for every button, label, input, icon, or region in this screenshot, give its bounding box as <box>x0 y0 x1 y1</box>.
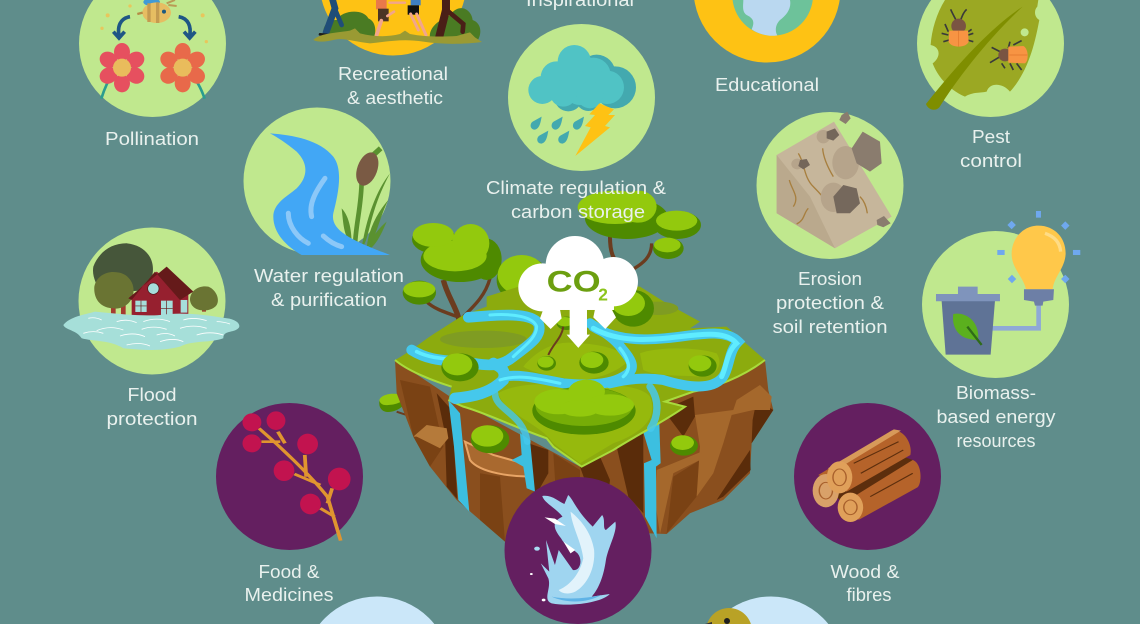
icon: globe <box>732 0 813 36</box>
label: water regulation: Water regulation <box>254 266 404 286</box>
label: pest control: Pest <box>972 127 1010 147</box>
label: water regulation: & purification <box>271 290 387 310</box>
panel: pollination icon <box>79 0 226 117</box>
icon: bin <box>936 287 1000 355</box>
icon: small cliff tree <box>379 394 432 427</box>
icon: branch <box>259 428 341 541</box>
panel: biomass energy icon <box>922 211 1080 378</box>
panel: bottom right circle <box>698 596 844 624</box>
label: climate regulation: Climate regulation & <box>486 178 666 198</box>
icon: leaf midrib <box>926 7 1023 110</box>
labels <box>105 64 1056 605</box>
panel: erosion protection icon <box>756 112 904 259</box>
panel: island <box>379 191 773 580</box>
icon: right tree <box>578 191 701 270</box>
label: flood: protection <box>106 409 198 429</box>
label: erosion: Erosion <box>798 269 862 289</box>
icon: river <box>270 133 390 255</box>
waterfalls <box>448 400 661 538</box>
icon: orange flower <box>157 43 208 99</box>
icon: lightning bolt <box>575 103 615 156</box>
icon: CO2 cloud <box>518 236 638 347</box>
icon: bee <box>137 0 177 23</box>
icon: small island tree <box>548 327 563 355</box>
icon: CO2 cloud: CO <box>547 266 601 299</box>
icon: berries <box>242 411 351 514</box>
icon: raindrops <box>531 117 584 144</box>
label: recreational: & aesthetic <box>347 88 443 108</box>
icon: light bulb <box>1012 226 1066 306</box>
icon: right jogger <box>439 0 463 37</box>
label: biomass: resources <box>956 431 1036 451</box>
icon: red house <box>128 267 193 317</box>
panel: water regulation icon <box>244 108 390 255</box>
grass muted patches <box>440 302 678 348</box>
label: recreational <box>338 64 448 108</box>
icon: left tree <box>403 223 502 335</box>
icon: flood water <box>63 312 239 350</box>
icon: dark tree <box>93 243 153 293</box>
river highlights <box>417 315 737 383</box>
cliff darker folds <box>400 380 700 580</box>
icon: pipe <box>990 305 1039 328</box>
label: pollination: Pollination <box>105 129 199 149</box>
icon: boulder shadows <box>791 130 859 212</box>
cliff ledges <box>413 385 772 534</box>
icon: river highlights <box>288 178 342 247</box>
label: educational: Educational <box>715 75 819 95</box>
icon: left jogger <box>320 0 342 35</box>
icon: middle joggers <box>376 0 426 35</box>
icon: leaf hole <box>1021 28 1029 36</box>
bushes <box>441 290 717 456</box>
icon: CO2 cloud: 2 <box>598 285 608 305</box>
icon: leaf <box>953 314 982 345</box>
icon: logs <box>813 429 921 522</box>
panel: wood and fibres icon <box>794 403 941 550</box>
label: recreational: Recreational <box>338 64 448 84</box>
icon: arrows <box>113 17 195 38</box>
label: pest control: control <box>960 151 1022 171</box>
label: pest control <box>960 127 1022 171</box>
label: wood: Wood & <box>830 562 900 582</box>
panel: bottom left circle <box>304 596 450 624</box>
label: food <box>244 562 334 605</box>
label: biomass: Biomass- <box>956 383 1036 403</box>
label: water regulation <box>254 266 404 310</box>
label: wood: fibres <box>846 585 892 605</box>
icon: ground <box>313 28 482 44</box>
label: biomass: based energy <box>936 407 1056 427</box>
panel: educational icon <box>694 0 840 62</box>
icon: back bush <box>497 255 550 303</box>
rivers <box>412 315 738 442</box>
panel: climate regulation icon <box>508 24 655 171</box>
panel: flood protection icon <box>63 228 239 374</box>
label: erosion <box>772 269 888 337</box>
icon: olive trees <box>94 272 218 317</box>
icon: red flower <box>97 43 147 99</box>
label: flood <box>106 385 198 429</box>
label: food: Food & <box>258 562 320 582</box>
icon: lower beetle <box>990 41 1028 70</box>
grass top <box>395 280 765 467</box>
panel: food and medicines icon <box>216 403 363 550</box>
label: climate regulation: carbon storage <box>511 202 645 222</box>
label: erosion: protection & <box>776 293 884 313</box>
label: wood <box>830 562 900 605</box>
icon: cattail <box>342 148 390 250</box>
icon: storm cloud <box>528 45 636 111</box>
icon: slope <box>777 122 892 248</box>
cliff body <box>395 360 773 580</box>
icon: boulders <box>798 112 891 227</box>
label: erosion: soil retention <box>772 317 888 337</box>
panel: fresh water icon <box>504 477 652 624</box>
icon: light rays <box>997 211 1080 283</box>
icon: pollen dots <box>100 4 208 43</box>
icon: water splash <box>530 495 616 605</box>
icon: leaf <box>931 0 1039 97</box>
icon: bushes <box>323 8 480 39</box>
grass brighter patches <box>498 343 719 463</box>
cliff crevices <box>437 393 773 513</box>
icon: flood waves <box>83 318 230 346</box>
icon: upper beetle <box>942 9 973 47</box>
panel: pest control icon <box>917 0 1064 117</box>
icon: soil cracks <box>789 148 867 224</box>
label: biomass <box>936 383 1056 451</box>
icon: bird <box>698 608 752 624</box>
panel: recreational icon <box>313 0 482 56</box>
label: climate regulation <box>486 178 666 222</box>
grass rim <box>395 360 765 467</box>
label: flood: Flood <box>128 385 176 405</box>
label: food: Medicines <box>244 585 334 605</box>
